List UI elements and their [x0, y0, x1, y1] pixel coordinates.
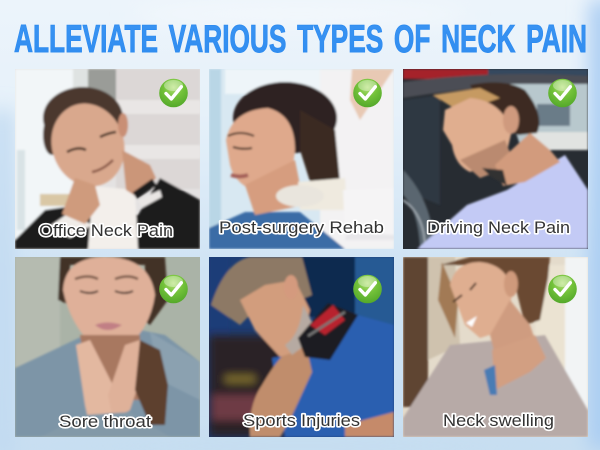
photo: woman holding throat in grey sweater	[15, 257, 200, 437]
icon: green check	[548, 275, 577, 303]
label: Driving Neck Pain: Driving Neck Pain	[427, 218, 570, 237]
photo: man in blue tee with wrapped glove at gym	[209, 257, 394, 437]
photo: woman with doctor checking neck	[209, 69, 394, 249]
label: Sore throat: Sore throat	[59, 412, 151, 431]
icon: green check	[159, 79, 188, 107]
panel: driving neck pain	[403, 69, 588, 249]
panel: sports injuries	[209, 257, 394, 437]
panel: office neck pain	[15, 69, 200, 249]
icon: green check	[353, 79, 382, 107]
icon: green check	[353, 275, 382, 303]
photo: man in car holding neck	[403, 69, 588, 249]
label: Office Neck Pain: Office Neck Pain	[39, 221, 173, 240]
panel: sore throat	[15, 257, 200, 437]
icon: green check	[159, 275, 188, 303]
icon: green check	[548, 79, 577, 107]
label: Neck swelling: Neck swelling	[443, 411, 554, 430]
photo: woman in beige shirt holding neck	[403, 257, 588, 437]
panel: neck swelling	[403, 257, 588, 437]
photo: man in suit holding neck at office	[15, 69, 200, 249]
label: Sports Injuries: Sports Injuries	[243, 411, 360, 430]
panel: post-surgery rehab	[209, 69, 394, 249]
label: Post-surgery Rehab: Post-surgery Rehab	[219, 218, 384, 237]
